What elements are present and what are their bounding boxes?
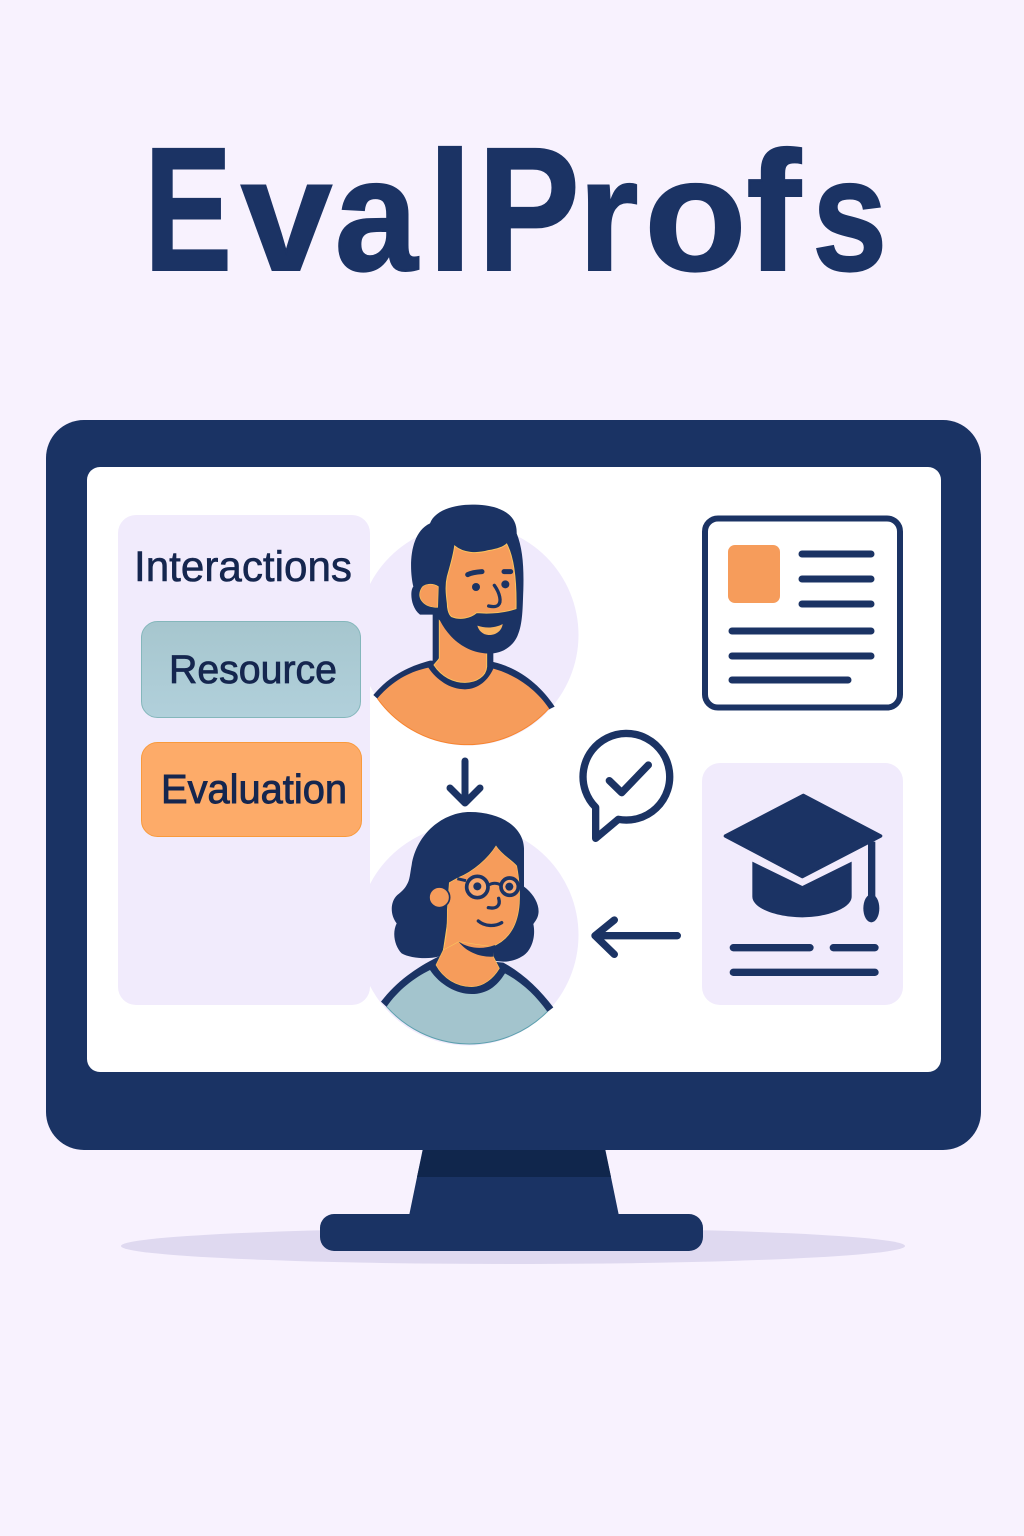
shirt xyxy=(373,661,555,745)
arrow: left xyxy=(595,920,677,954)
title: l xyxy=(428,117,472,307)
button: resource: Resource xyxy=(169,648,337,692)
title: s xyxy=(812,125,887,304)
hair xyxy=(392,812,539,962)
monitor stand xyxy=(320,1148,703,1251)
nose and mouth xyxy=(478,898,502,925)
icon: speech bubble with check xyxy=(583,733,670,838)
title: E xyxy=(144,112,232,308)
title: v xyxy=(241,125,332,304)
chin hair xyxy=(459,942,495,957)
mouth xyxy=(477,624,503,635)
avatar: woman with glasses xyxy=(358,812,578,1046)
neck xyxy=(433,612,493,682)
panel: interactions xyxy=(118,515,370,1005)
title: P xyxy=(478,112,580,308)
document lines xyxy=(732,554,871,680)
neck xyxy=(436,923,499,987)
eyebrows and eyes xyxy=(468,572,511,591)
button: resource xyxy=(142,622,360,718)
shirt xyxy=(381,957,553,1044)
hair and beard xyxy=(411,505,523,653)
document thumbnail xyxy=(728,545,780,603)
title: f xyxy=(746,117,801,307)
icon: graduation cap xyxy=(725,795,881,922)
face xyxy=(443,846,520,950)
title: r xyxy=(578,125,638,304)
face xyxy=(446,544,516,618)
title: a xyxy=(335,125,419,304)
arrow: down xyxy=(450,761,480,803)
avatar: man with beard xyxy=(358,505,578,746)
nose xyxy=(489,585,500,607)
floor shadow xyxy=(121,1228,905,1264)
heading: interactions: Interactions xyxy=(134,543,352,591)
ear xyxy=(420,584,438,607)
panel: graduation cap xyxy=(702,763,903,1005)
title: o xyxy=(644,125,746,304)
monitor screen xyxy=(87,467,941,1072)
button: evaluation: Evaluation xyxy=(161,766,347,812)
monitor frame xyxy=(46,420,981,1150)
icon: document card xyxy=(705,518,900,708)
ear xyxy=(429,887,450,908)
caption lines xyxy=(733,948,875,972)
button: evaluation xyxy=(142,742,362,836)
glasses xyxy=(457,876,518,898)
